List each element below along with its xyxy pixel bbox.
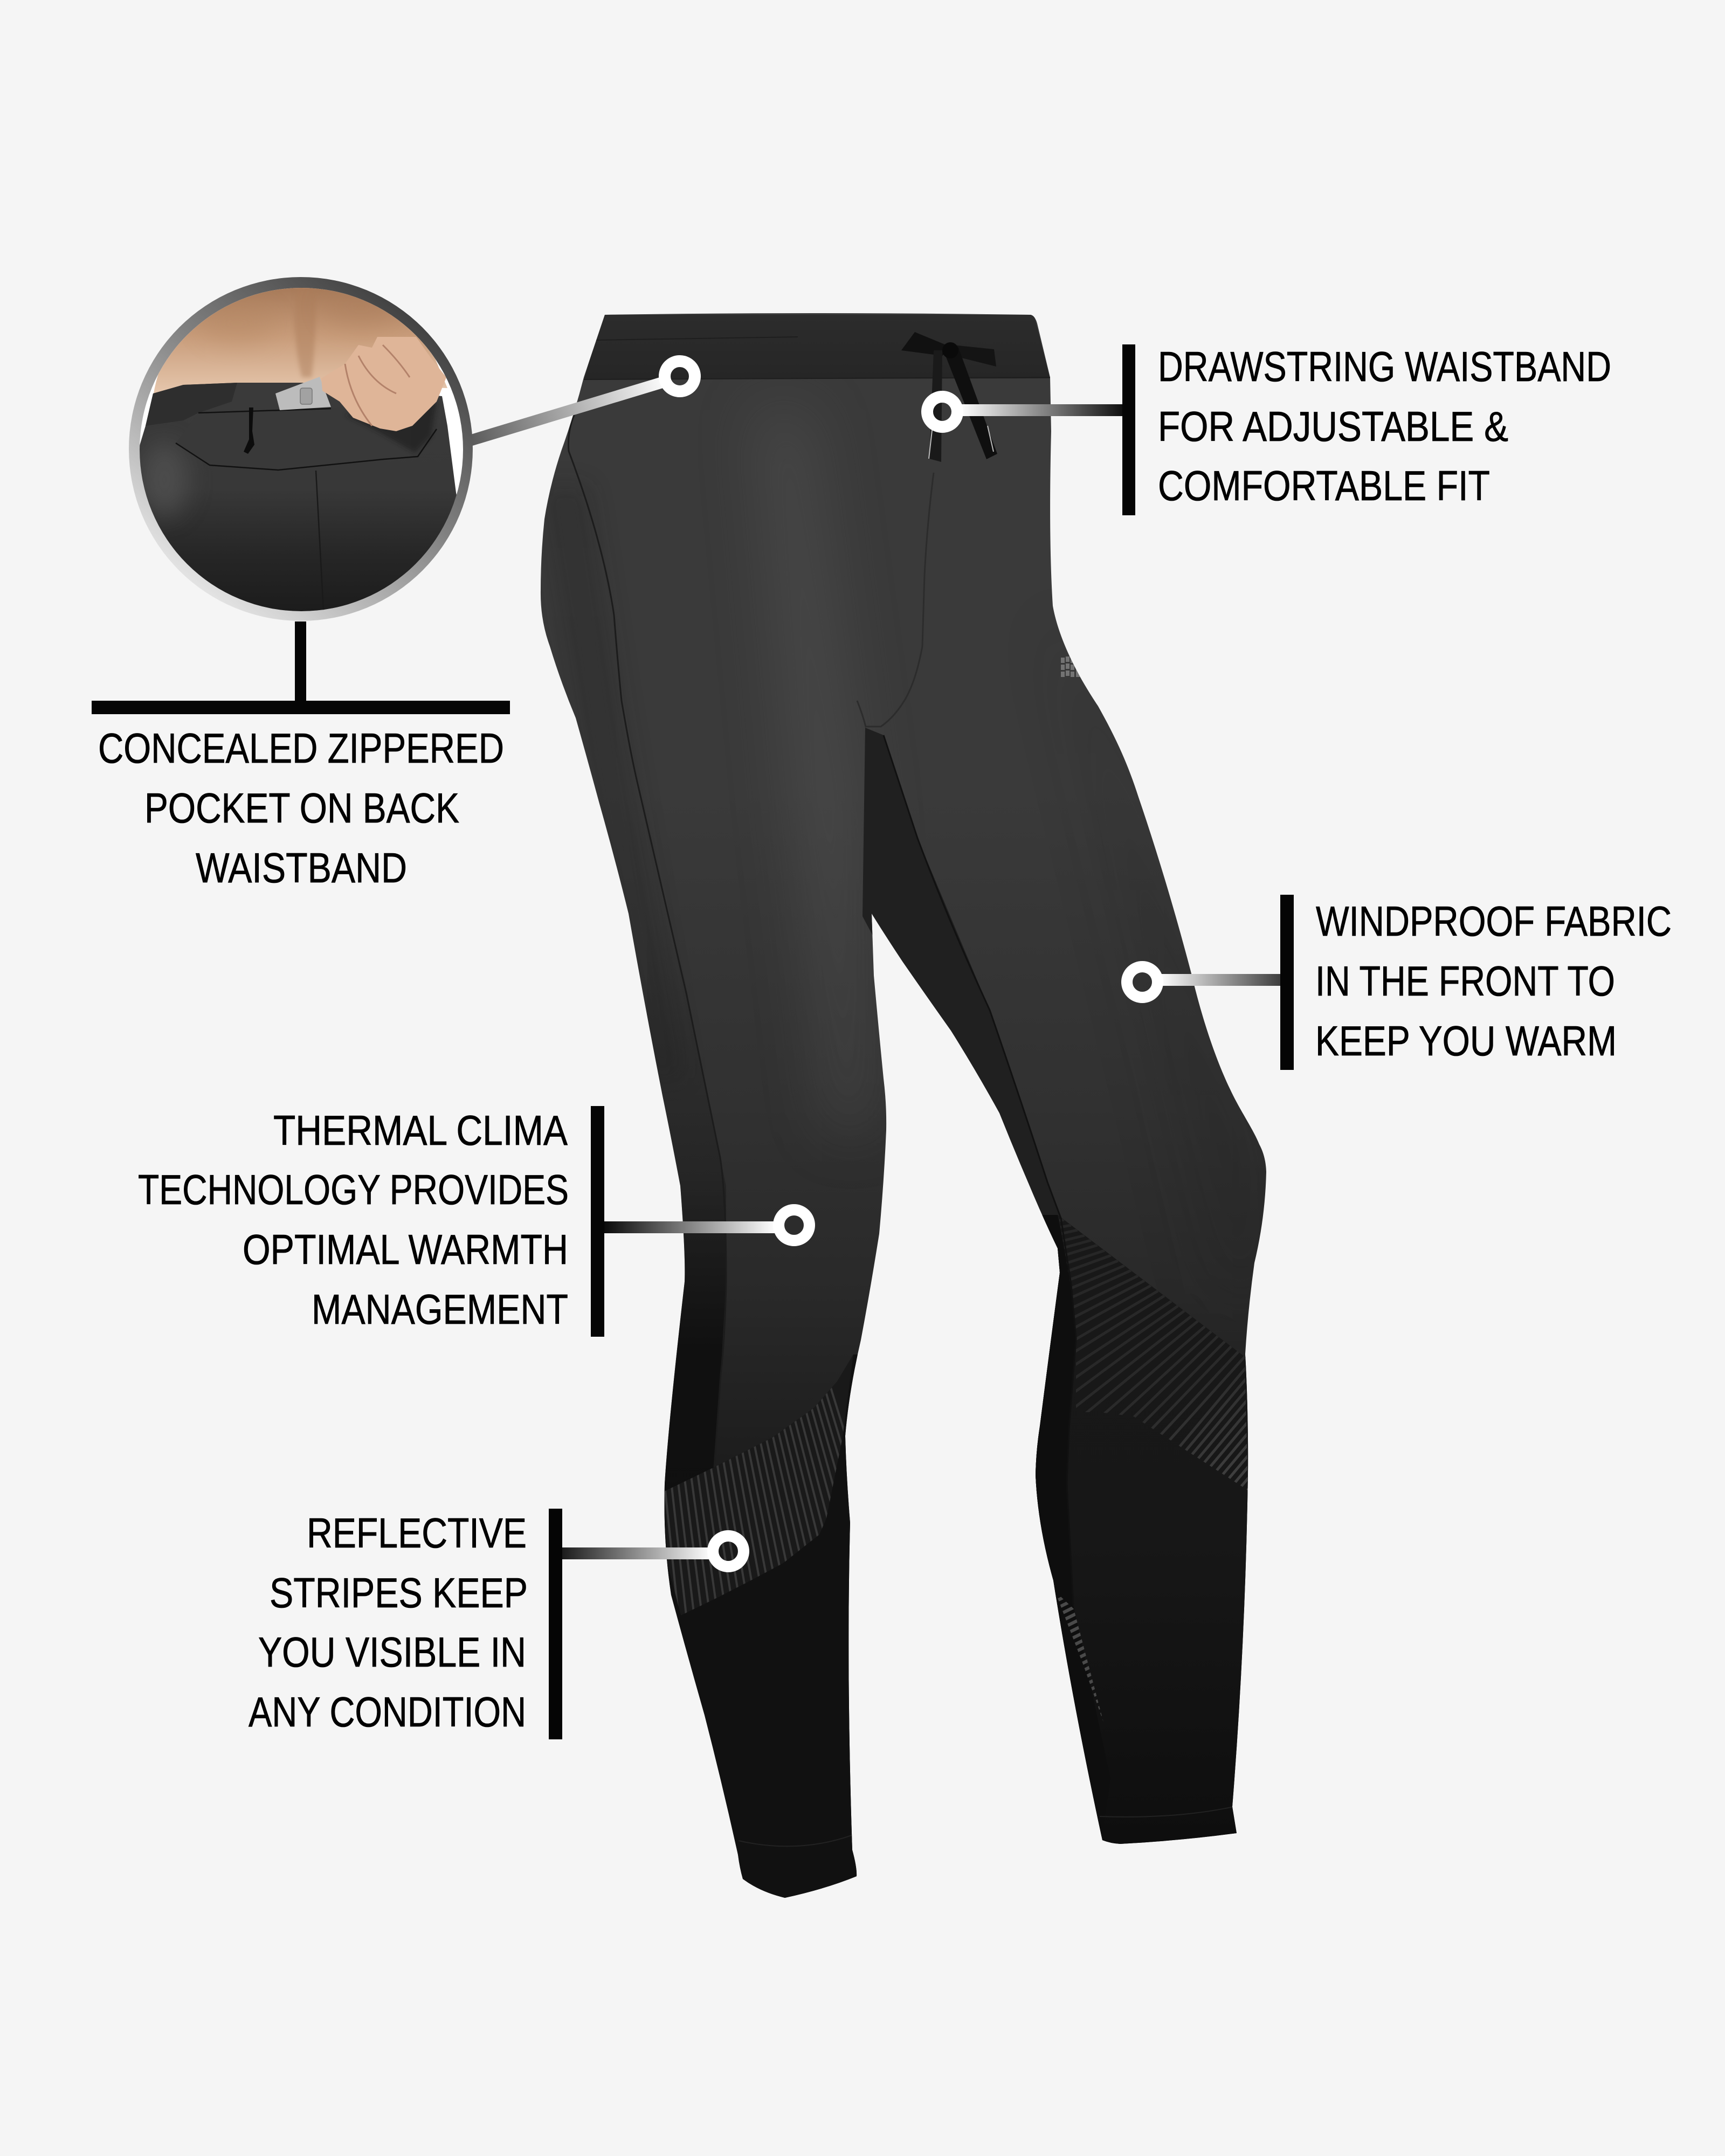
text: ANY CONDITION: [249, 1688, 526, 1736]
waistband stitch lines: [584, 337, 1050, 379]
callout: waistband pocket: [92, 277, 695, 892]
text: [138, 1107, 569, 1333]
shadow on outer hip: [544, 487, 658, 1073]
tights on body: [108, 383, 485, 620]
pocket shadow under hand: [345, 402, 437, 453]
seat highlight: [140, 442, 189, 517]
marker: [713, 1536, 744, 1566]
text: [1315, 897, 1672, 1065]
right reflective stripes: [791, 1215, 1256, 1728]
zip panel: [176, 399, 437, 470]
text: pocket feature: POCKET ON BACK: [144, 784, 459, 832]
callout: drawstring waistband: [927, 343, 1611, 515]
magnifier: zip pocket detail: [108, 277, 485, 708]
waistband: [584, 315, 1050, 379]
text: THERMAL CLIMA: [273, 1107, 568, 1154]
bracket bar: [591, 1106, 604, 1337]
text: REFLECTIVE: [307, 1509, 527, 1557]
inner strip of right calf: [1024, 1215, 1110, 1849]
bracket bar: [1122, 344, 1135, 515]
connector: pocket magnifier to waistband: [469, 381, 668, 441]
bracket bar: [1280, 895, 1294, 1070]
text: MANAGEMENT: [312, 1286, 568, 1333]
text: YOU VISIBLE IN: [258, 1628, 526, 1676]
marker: [778, 1210, 810, 1241]
drawstring bow: [901, 332, 997, 462]
connector: [1156, 974, 1288, 986]
lower right leg: [1036, 1215, 1248, 1844]
logo: brand mark on thigh: [1061, 657, 1086, 677]
left reflective stripes: [650, 1348, 910, 1644]
text: pocket feature: WAISTBAND: [196, 844, 407, 892]
callout: thermal clima: [138, 1106, 810, 1337]
lower left leg: [664, 1355, 858, 1898]
text: COMFORTABLE FIT: [1158, 462, 1490, 509]
product: black thermal running tights: [539, 313, 1272, 1908]
bracket bar: pocket: [92, 701, 510, 714]
left stripe panel background: [664, 1355, 853, 1615]
text: pocket feature: CONCEALED ZIPPERED: [98, 724, 504, 772]
text: FOR ADJUSTABLE &: [1158, 403, 1508, 450]
calf stripes: [1051, 1574, 1110, 1754]
skin: lower back: [153, 280, 447, 396]
card chip: [300, 388, 312, 404]
text: KEEP YOU WARM: [1315, 1017, 1617, 1065]
text: OPTIMAL WARMTH: [243, 1226, 568, 1273]
marker: [927, 397, 957, 427]
marker: [1127, 967, 1158, 997]
zip pull: [244, 407, 254, 454]
sheen on left thigh: [778, 457, 865, 1095]
callout: windproof fabric: [1127, 895, 1672, 1070]
text: [249, 1509, 528, 1736]
waistband fold: [146, 383, 237, 426]
credit card: [275, 377, 331, 410]
shadow on right thigh edge: [1196, 991, 1264, 1244]
text: STRIPES KEEP: [270, 1569, 528, 1616]
connector: [597, 1221, 780, 1233]
outer strip of left leg: [652, 1045, 726, 1491]
zip and pocket seam: [176, 409, 437, 611]
marker: pocket: [665, 361, 695, 391]
dark inner panel of right leg: [862, 728, 1076, 1605]
connector stem under magnifier: [295, 621, 306, 708]
text: [1158, 343, 1611, 509]
connector: [555, 1547, 714, 1559]
back muscle shade: [323, 286, 399, 329]
spine shadow: [295, 286, 316, 377]
text: TECHNOLOGY PROVIDES: [138, 1166, 569, 1213]
text: IN THE FRONT TO: [1315, 957, 1615, 1005]
connector: [954, 404, 1127, 416]
seams: [568, 414, 1233, 1846]
text: DRAWSTRING WAISTBAND: [1158, 343, 1611, 390]
hand holding card: [321, 337, 446, 431]
callout: reflective stripes: [249, 1509, 744, 1739]
bracket bar: [549, 1509, 562, 1739]
fingers: [345, 345, 410, 426]
text: pocket feature: [98, 724, 504, 892]
